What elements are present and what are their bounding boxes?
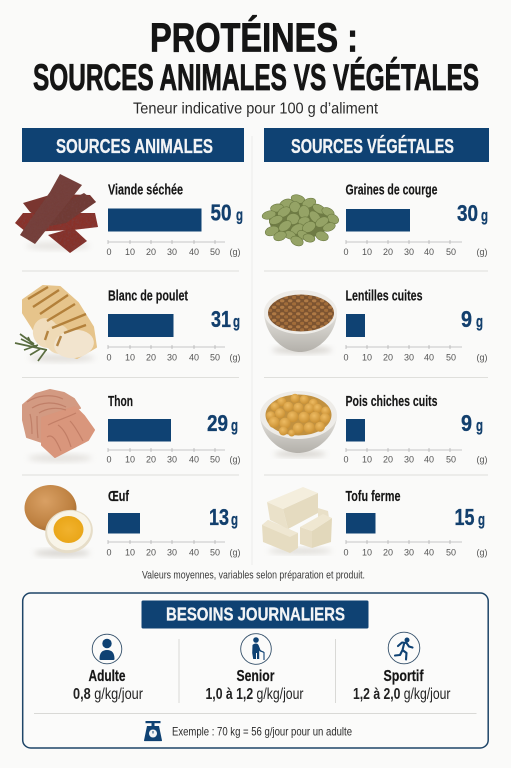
axis: 0	[106, 247, 112, 257]
axis: (g)	[230, 247, 241, 257]
heading: besoins journaliers: BESOINS JOURNALIERS	[166, 604, 345, 624]
axis	[106, 448, 241, 464]
bar: 13 g	[108, 513, 140, 534]
axis: 10	[362, 352, 372, 362]
value: 50	[210, 200, 232, 226]
axis: (g)	[476, 247, 488, 257]
axis: 30	[404, 454, 414, 464]
axis: 50	[446, 548, 456, 558]
panel: sources animales	[15, 128, 244, 558]
axis: 0	[106, 352, 112, 362]
icon: senior with cane	[241, 634, 271, 664]
icon: chickpea bowl	[260, 391, 337, 457]
value: 30	[457, 200, 478, 226]
icon: pumpkin seeds	[261, 193, 340, 248]
axis: 50	[446, 352, 456, 362]
axis	[106, 240, 241, 257]
axis: 10	[125, 548, 135, 558]
axis: 40	[424, 352, 434, 362]
axis: 10	[362, 247, 372, 257]
axis: 10	[125, 454, 135, 464]
axis: 50	[446, 454, 456, 464]
axis: (g)	[476, 352, 488, 362]
axis: 40	[189, 548, 199, 558]
name: Adulte	[88, 668, 126, 685]
value: 15	[454, 504, 475, 530]
axis: 0	[106, 454, 112, 464]
axis: 0	[343, 454, 349, 464]
axis: (g)	[230, 454, 241, 464]
label: Viande séchée	[108, 182, 183, 198]
footnote: Valeurs moyennes, variables selon préparation et produit.	[142, 570, 365, 582]
bar: 9 g	[346, 419, 365, 442]
value: 1,2 à 2,0 g/kg/jour	[353, 686, 450, 703]
label: Tofu ferme	[346, 488, 400, 505]
value: 13	[209, 504, 229, 530]
axis: 20	[383, 454, 393, 464]
axis	[343, 240, 488, 257]
title: PROTÉINES :	[150, 14, 358, 60]
value: g	[236, 206, 243, 224]
value: g	[478, 510, 485, 529]
column: adulte	[73, 634, 143, 703]
label: Œuf	[108, 488, 130, 505]
value	[461, 410, 483, 436]
axis: 50	[210, 247, 220, 257]
icon: jerky	[15, 174, 98, 253]
example text: Exemple : 70 kg = 56 g/jour pour un adulte	[172, 724, 352, 738]
axis: 50	[210, 454, 220, 464]
axis: (g)	[476, 454, 488, 464]
axis: 30	[167, 454, 177, 464]
axis	[106, 540, 241, 558]
bar: 15 g	[346, 513, 376, 534]
axis: 40	[189, 247, 199, 257]
axis: 30	[404, 548, 414, 558]
axis: (g)	[230, 548, 241, 558]
axis	[343, 448, 488, 464]
axis: 20	[383, 352, 393, 362]
row: tofu ferme	[262, 487, 488, 558]
row: œuf	[24, 485, 241, 558]
label: Pois chiches cuits	[346, 393, 438, 410]
column: sportif	[353, 632, 450, 703]
axis: 30	[404, 247, 414, 257]
row: pois chiches cuits	[260, 391, 488, 464]
axis	[106, 345, 241, 362]
axis: 40	[189, 454, 199, 464]
value: g	[476, 312, 483, 331]
axis: 20	[146, 548, 156, 558]
axis: 30	[167, 247, 177, 257]
axis: 50	[210, 352, 220, 362]
value: 29	[207, 410, 228, 436]
axis: 10	[125, 247, 135, 257]
axis: 30	[167, 352, 177, 362]
axis: (g)	[476, 548, 488, 558]
example line	[144, 721, 352, 741]
value: 0,8 g/kg/jour	[73, 686, 143, 703]
axis: 50	[446, 247, 456, 257]
bar: 29 g	[108, 419, 171, 442]
column divider	[251, 136, 253, 565]
heading: besoins journaliers	[142, 600, 368, 628]
axis: 30	[404, 352, 414, 362]
panel: sources végétales	[260, 128, 489, 558]
axis: 10	[362, 454, 372, 464]
bar: 31 g	[108, 314, 174, 337]
icon: kitchen scale	[144, 721, 162, 741]
value: g	[231, 416, 238, 435]
icon: adult	[92, 634, 122, 664]
icon: runner	[388, 632, 420, 664]
label: Thon	[108, 393, 133, 410]
panel: besoins journaliers	[23, 593, 488, 748]
axis: 40	[189, 352, 199, 362]
heading: sources végétales: SOURCES VÉGÉTALES	[291, 135, 454, 158]
row: lentilles cuites	[264, 288, 488, 362]
column: senior	[206, 634, 304, 703]
heading: sources végétales	[264, 128, 489, 162]
value: 9	[461, 306, 472, 332]
bar: 30 g	[346, 209, 410, 232]
value: g	[231, 510, 238, 529]
axis: 0	[106, 548, 112, 558]
value: g	[233, 312, 240, 331]
axis: 0	[343, 352, 349, 362]
label: Lentilles cuites	[346, 288, 422, 304]
axis: 10	[125, 352, 135, 362]
label: Blanc de poulet	[108, 288, 188, 304]
name: Sportif	[384, 668, 424, 685]
axis: 50	[210, 548, 220, 558]
value: g	[476, 416, 483, 435]
axis	[343, 345, 488, 362]
value: 9	[461, 410, 472, 436]
value: g	[481, 206, 488, 225]
bar: 9 g	[346, 314, 365, 337]
value: 1,0 à 1,2 g/kg/jour	[206, 686, 304, 703]
axis	[343, 540, 488, 558]
row: thon	[23, 390, 241, 464]
value	[461, 306, 483, 332]
axis: 20	[383, 247, 393, 257]
bar: 50 g	[108, 208, 202, 232]
axis: 20	[146, 352, 156, 362]
axis: 20	[146, 454, 156, 464]
row: blanc de poulet	[15, 286, 241, 362]
axis: 40	[424, 247, 434, 257]
axis: 20	[383, 548, 393, 558]
axis: 30	[167, 548, 177, 558]
axis: 40	[424, 548, 434, 558]
axis: 10	[362, 548, 372, 558]
label: Graines de courge	[346, 182, 438, 198]
icon: egg	[24, 485, 98, 558]
axis: 0	[343, 247, 349, 257]
axis: (g)	[230, 352, 241, 362]
axis: 0	[343, 548, 349, 558]
heading: sources animales: SOURCES ANIMALES	[56, 136, 213, 158]
row: viande séchée	[15, 174, 243, 257]
row: graines de courge	[261, 182, 488, 257]
axis: 40	[424, 454, 434, 464]
axis: 20	[146, 247, 156, 257]
icon: lentil bowl	[264, 290, 337, 354]
title	[33, 14, 479, 98]
value: 31	[211, 306, 231, 332]
icon: tuna	[23, 390, 94, 462]
icon: grilled chicken	[15, 286, 96, 362]
heading: sources animales	[22, 128, 244, 162]
name: Senior	[236, 668, 274, 685]
icon: tofu	[262, 487, 332, 554]
subtitle: Teneur indicative pour 100 g d’aliment	[133, 100, 379, 118]
